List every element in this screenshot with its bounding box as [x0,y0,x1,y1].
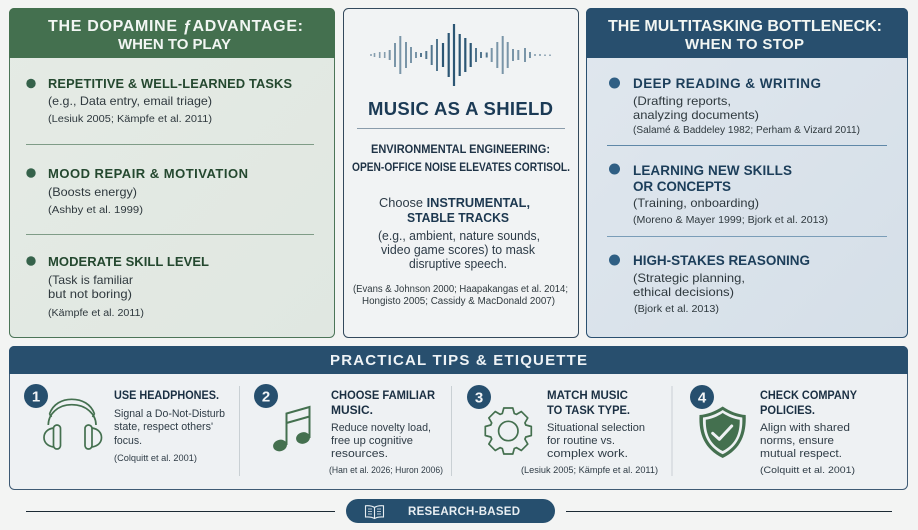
number badge 3: 3 [475,390,483,406]
citations: shield: Hongisto 2005; Cassidy & MacDonald 2007) [362,296,555,307]
text: environmental engineering: ENVIRONMENTAL ENGINEERING: [371,144,550,156]
item: high-stakes reasoning: ethical decisions) [633,285,734,299]
text: instrumental tracks advice: video game scores) to mask [381,242,535,257]
text: tip 2: free up cognitive [331,435,413,447]
citations: shield [353,284,568,307]
item: repetitive tasks [26,76,292,125]
item: deep reading: analyzing documents) [633,108,759,122]
text: tip 4: CHECK COMPANY [760,390,857,402]
panel: the dopamine advantage [9,8,335,338]
panel: practical tips and etiquette [9,346,908,490]
item: learning new skills: (Training, onboarding) [633,196,759,210]
number badge 1 [24,384,48,408]
item: moderate skill level: (Task is familiar [48,273,133,287]
panel header: when to stop: WHEN TO STOP [685,36,804,53]
text: environmental engineering: OPEN-OFFICE NOISE ELEVATES CORTISOL. [352,162,570,174]
number badge 2: 2 [262,388,270,406]
panel header: when to stop [586,8,908,58]
text: tip 1: state, respect others' [114,421,213,433]
icon: sound waveform [370,24,550,86]
text: instrumental tracks advice: STABLE TRACKS [407,210,509,225]
text: tip 3: Situational selection [547,422,645,434]
text: tip 2: MUSIC. [331,405,373,417]
tip 2: choose familiar music [254,384,443,476]
text: tip 2 [329,390,443,476]
text: tip 1: (Colquitt et al. 2001) [114,453,197,464]
item: learning new skills: LEARNING NEW SKILLS [633,163,792,178]
icon: open book [366,506,384,518]
item: repetitive tasks: REPETITIVE & WELL-LEARNED TASKS [48,76,292,91]
citations: shield: (Evans & Johnson 2000; Haapakangas et al. 2014; [353,284,568,295]
icon: shield with check [699,406,746,458]
item: learning new skills [609,163,828,226]
item: high-stakes reasoning: (Bjork et al. 2013) [634,304,719,315]
number badge 2 [254,384,278,408]
text: instrumental tracks advice: Choose INSTRUMENTAL, [379,195,530,210]
text: tip 4: (Colquitt et al. 2001) [760,465,855,476]
item: learning new skills: (Moreno & Mayer 1999; Bjork et al. 2013) [633,215,828,226]
item: moderate skill level: (Kämpfe et al. 2011) [48,308,144,319]
item: high-stakes reasoning [609,253,810,315]
tip 1: use headphones [24,384,225,464]
item: moderate skill level [26,254,209,319]
text: tip 1: Signal a Do-Not-Disturb [114,408,225,420]
item: mood repair: MOOD REPAIR & MOTIVATION [48,166,248,181]
number badge 3 [467,385,491,409]
text: tip 4 [760,390,857,476]
badge: research-based: RESEARCH-BASED [408,506,520,518]
item: deep reading: (Drafting reports, [633,94,731,108]
text: tip 1 [114,390,225,464]
panel header: practical tips [9,346,908,374]
item: high-stakes reasoning: (Strategic planning, [633,271,745,285]
item: mood repair [26,166,248,216]
panel header: practical tips: PRACTICAL TIPS & ETIQUETTE [330,352,587,369]
tip 3: match music to task type [467,385,658,476]
item: mood repair: (Boosts energy) [48,185,137,199]
number badge 4 [690,385,714,409]
text: tip 3 [521,390,658,476]
number badge 1: 1 [32,388,40,406]
text: tip 4: mutual respect. [760,448,842,460]
item: deep reading [609,76,860,136]
heading: music as a shield: MUSIC AS A SHIELD [368,98,553,119]
text: environmental engineering [352,144,570,174]
item: moderate skill level: but not boring) [48,287,132,301]
item: deep reading: (Salamé & Baddeley 1982; Perham & Vizard 2011) [633,125,860,136]
text: tip 1: focus. [114,435,142,447]
panel header: when to play: WHEN TO PLAY [118,36,231,53]
text: tip 2: resources. [331,448,388,460]
icon: headphones [44,399,102,449]
text: tip 4: Align with shared [760,422,850,434]
icon: music notes [272,407,311,453]
text: tip 3: complex work. [547,448,628,460]
text: tip 3: MATCH MUSIC [547,390,628,402]
panel: the multitasking bottleneck [586,8,908,338]
item: learning new skills: OR CONCEPTS [633,179,731,194]
icon: gear [485,408,531,454]
text: instrumental tracks advice: (e.g., ambient, nature sounds, [378,228,540,243]
text: tip 2: (Han et al. 2026; Huron 2006) [329,465,443,476]
panel header: when to stop: THE MULTITASKING BOTTLENECK: [608,18,882,35]
item: high-stakes reasoning: HIGH-STAKES REASONING [633,253,810,268]
item: repetitive tasks: (Lesiuk 2005; Kämpfe et al. 2011) [48,114,212,125]
text: tip 2: CHOOSE FAMILIAR [331,390,436,402]
item: moderate skill level: MODERATE SKILL LEVEL [48,254,209,269]
text: tip 4: POLICIES. [760,405,815,417]
tip 4: check company policies [690,385,857,476]
text: tip 4: norms, ensure [760,435,834,447]
panel header: when to play: THE DOPAMINE ƒADVANTAGE: [48,18,303,35]
text: tip 3: TO TASK TYPE. [547,405,630,417]
text: tip 1: USE HEADPHONES. [114,390,219,402]
item: mood repair: (Ashby et al. 1999) [48,205,143,216]
text: tip 3: (Lesiuk 2005; Kämpfe et al. 2011) [521,465,658,476]
number badge 4: 4 [698,390,707,406]
text: tip 3: for routine vs. [547,435,615,447]
text: tip 2: Reduce novelty load, [331,422,431,434]
panel header: when to play [9,8,335,58]
item: repetitive tasks: (e.g., Data entry, email triage) [48,94,212,108]
text: instrumental tracks advice: disruptive speech. [409,256,507,271]
item: deep reading: DEEP READING & WRITING [633,76,821,91]
text: instrumental tracks advice [378,195,540,271]
panel: music as a shield [344,8,578,338]
badge: research-based [346,499,555,523]
